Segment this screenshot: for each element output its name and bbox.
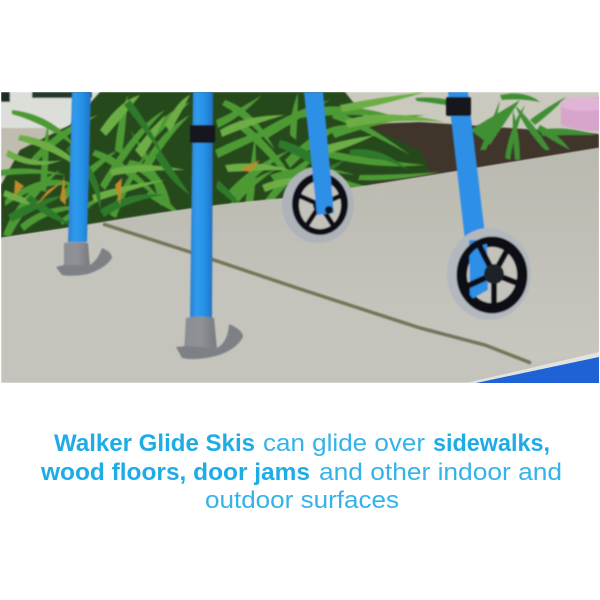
caption line 3: outdoor surfaces	[205, 487, 399, 514]
caption line 1: can glide over	[263, 430, 425, 457]
left walker leg with glide ski	[56, 92, 112, 276]
photo: walker on sidewalk	[1, 92, 600, 383]
caption line 1: Walker Glide Skis	[54, 430, 255, 457]
caption line 2: and other indoor and	[319, 459, 562, 486]
caption line 1	[54, 430, 550, 457]
planting: green leaves	[1, 92, 596, 237]
front wheel and leg	[446, 92, 531, 320]
concrete: base	[1, 148, 599, 383]
caption	[40, 430, 562, 514]
caption line 1: sidewalks,	[433, 430, 550, 457]
planting: dark base	[1, 92, 430, 238]
planting: right cluster	[415, 94, 596, 160]
planting: orange dead leaves	[14, 160, 260, 205]
sidewalk seam	[103, 224, 531, 363]
centre walker leg with glide ski	[176, 92, 243, 359]
blue mat corner	[466, 352, 599, 383]
concrete: upper slab	[153, 147, 599, 352]
caption line 2	[40, 459, 562, 486]
rear wheel and leg	[282, 92, 354, 243]
soil bed	[360, 121, 599, 186]
pink cylinder	[560, 97, 600, 131]
background pavement and wall	[1, 92, 599, 192]
caption line 2: wood floors, door jams	[40, 459, 310, 486]
